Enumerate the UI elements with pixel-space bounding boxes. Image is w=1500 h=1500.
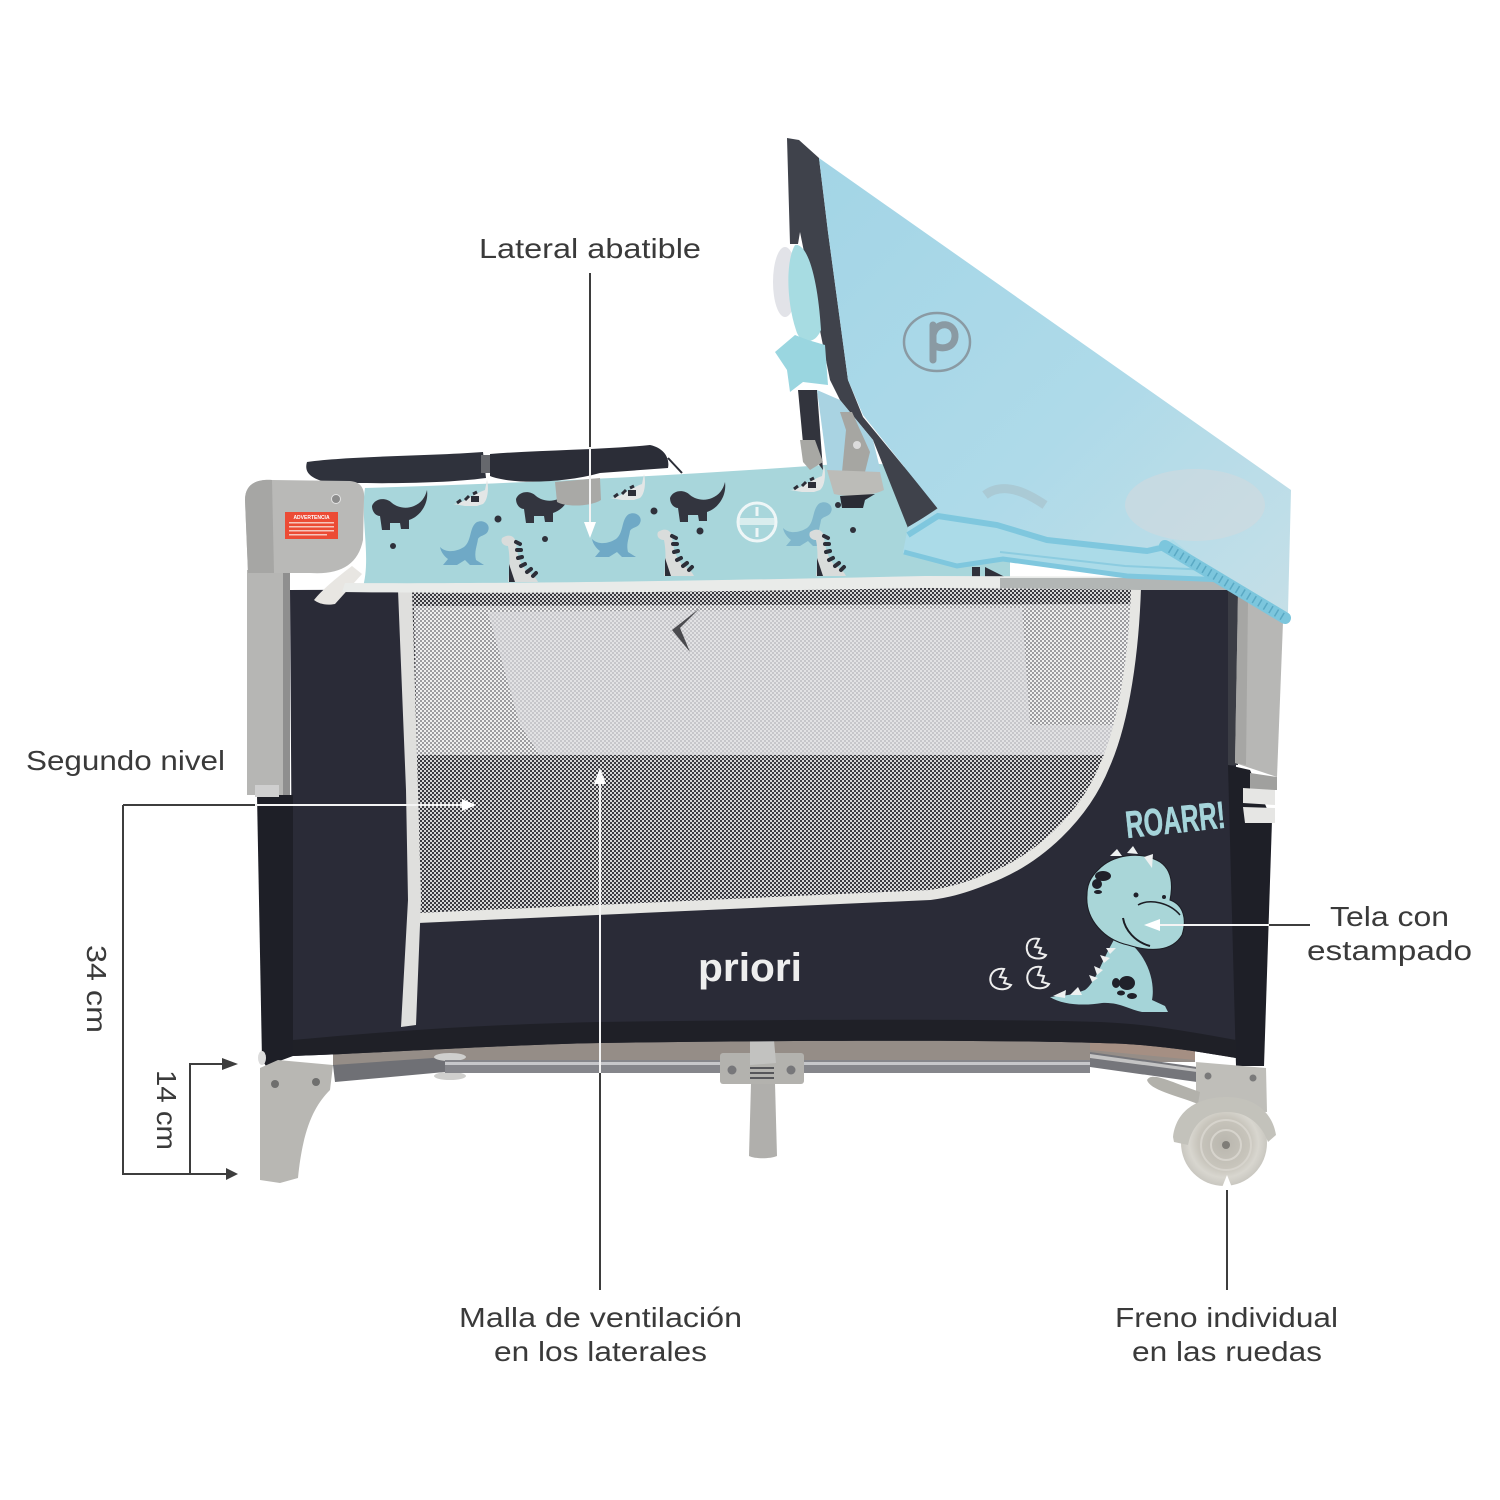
white twisted strap and top hem	[314, 566, 1236, 605]
corner housing with warning label	[245, 480, 364, 573]
label: Lateral abatible: Lateral abatible	[479, 233, 701, 264]
hanging plush toy	[773, 245, 828, 392]
label: Tela con estampado	[1307, 901, 1472, 966]
base rail and floor of the crib	[333, 1040, 1197, 1082]
label: Malla de ventilación en los laterales: Malla de ventilación	[459, 1302, 742, 1333]
brake wheel	[1147, 1062, 1276, 1186]
blue canopy	[819, 158, 1291, 623]
left grey pole	[247, 570, 284, 795]
round care logo	[738, 503, 776, 541]
label: Freno individual en las ruedas: Freno individual	[1115, 1302, 1338, 1333]
grey centre clip	[555, 478, 601, 506]
label: Tela con estampado: Tela con	[1330, 901, 1449, 932]
bottom hem	[293, 1020, 1236, 1058]
vertical white strap	[398, 590, 421, 1027]
right grey pole	[1228, 590, 1283, 823]
dark side panel	[290, 586, 1236, 1058]
folded dark fabric roll	[306, 445, 682, 483]
left leg	[258, 1051, 333, 1183]
label: Freno individual en las ruedas	[1115, 1302, 1338, 1367]
centre leg	[720, 1040, 804, 1158]
arrow: Tela con estampado	[1144, 919, 1310, 931]
arrow: Lateral abatible	[584, 273, 596, 538]
right corner strip	[1228, 765, 1272, 1066]
arrow: Freno individual	[1221, 1175, 1233, 1290]
canopy dark lining	[787, 138, 938, 528]
canopy p logo	[904, 313, 970, 371]
label: Malla de ventilación en los laterales: en los laterales	[494, 1336, 707, 1367]
dimension bracket: 14 cm	[190, 1058, 238, 1174]
arrow: Malla de ventilación	[594, 768, 606, 1290]
footprints	[990, 939, 1049, 989]
dimension bracket: 34 cm	[123, 805, 238, 1180]
printed fabric strip	[362, 462, 1010, 590]
warning label: ADVERTENCIA	[293, 515, 330, 521]
canopy arm bracket	[800, 412, 884, 508]
priori brand name: priori	[698, 946, 802, 990]
dinosaur print	[1050, 846, 1184, 1012]
crib illustration	[245, 138, 1291, 1186]
left corner strip	[257, 795, 293, 1066]
mesh white trim	[418, 588, 1136, 918]
label: Tela con estampado: estampado	[1307, 935, 1472, 966]
ventilation mesh window	[398, 586, 1136, 1027]
label: 34 cm: 34 cm	[81, 945, 112, 1033]
label: Freno individual en las ruedas: en las ruedas	[1132, 1336, 1322, 1367]
ROARR lettering: ROARR!	[1124, 795, 1227, 847]
label: Segundo nivel: Segundo nivel	[26, 745, 225, 776]
arrow: Segundo nivel	[123, 799, 476, 811]
label: Malla de ventilación en los laterales	[459, 1302, 742, 1367]
label: 14 cm: 14 cm	[151, 1070, 182, 1150]
